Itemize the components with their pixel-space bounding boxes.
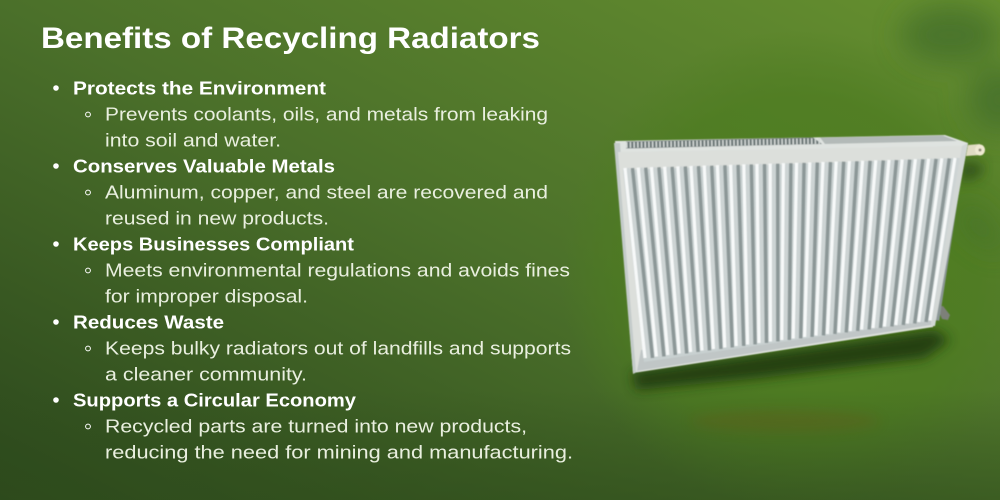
benefit: conserves valuable metals xyxy=(53,156,548,228)
icon: bottom valve xyxy=(937,306,950,320)
benefit: conserves valuable metals: reused in new products. xyxy=(105,208,329,228)
benefit: supports a circular economy: reducing the need for mining and manufacturing. xyxy=(105,442,573,462)
benefit: conserves valuable metals: Conserves Valuable Metals xyxy=(73,156,335,176)
benefit: reduces waste: Reduces Waste xyxy=(73,312,224,332)
title: Benefits of Recycling Radiators xyxy=(41,22,540,55)
top grille xyxy=(626,136,957,148)
benefit: reduces waste: a cleaner community. xyxy=(105,364,307,384)
benefit: keeps businesses compliant xyxy=(53,234,570,306)
front face xyxy=(618,146,962,372)
benefit: reduces waste xyxy=(53,312,571,384)
benefit: reduces waste: Keeps bulky radiators out of landfills and supports xyxy=(105,338,571,358)
left side panel xyxy=(614,143,637,374)
benefit: protects the environment: Prevents coolants, oils, and metals from leaking xyxy=(105,104,548,124)
icon: top-right cap xyxy=(966,144,985,156)
radiator illustration xyxy=(614,135,985,374)
radiator body xyxy=(615,135,968,373)
radiator shadow and floor glow xyxy=(632,160,985,432)
lower strip xyxy=(637,312,932,371)
benefit: protects the environment: into soil and water. xyxy=(105,130,281,150)
benefit: supports a circular economy: Recycled parts are turned into new products, xyxy=(105,416,527,436)
benefit: supports a circular economy: Supports a Circular Economy xyxy=(73,390,357,410)
fins xyxy=(623,158,962,362)
benefit: protects the environment xyxy=(53,78,548,150)
benefit: protects the environment: Protects the Environment xyxy=(73,78,326,98)
benefit: conserves valuable metals: Aluminum, copper, and steel are recovered and xyxy=(105,182,548,202)
benefit: supports a circular economy xyxy=(53,390,573,462)
benefit: keeps businesses compliant: Keeps Businesses Compliant xyxy=(73,234,354,254)
benefits list xyxy=(53,78,573,462)
benefit: keeps businesses compliant: for improper disposal. xyxy=(105,286,308,306)
benefit: keeps businesses compliant: Meets environmental regulations and avoids fines xyxy=(105,260,570,280)
right edge xyxy=(931,143,968,326)
